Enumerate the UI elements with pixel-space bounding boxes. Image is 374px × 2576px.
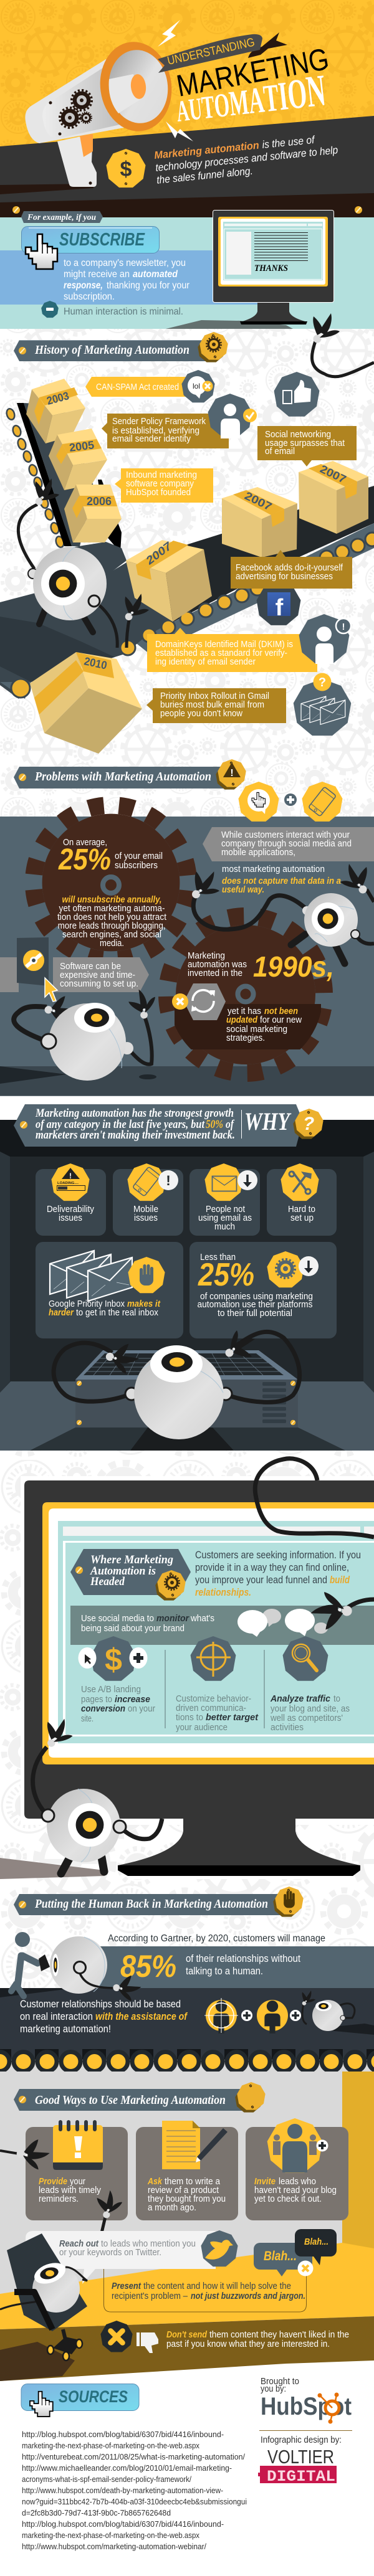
band: social monitoring: Use social media to bbox=[81, 1613, 154, 1624]
callout: software cost bbox=[0, 957, 149, 992]
callout: social data: does not capture that data in a bbox=[222, 876, 341, 886]
card: deliverability: Deliverability bbox=[47, 1205, 95, 1215]
card: provide reminders: leads with timely bbox=[39, 2185, 102, 2195]
bubble: reach out on twitter: to leads who mention you bbox=[101, 2239, 196, 2249]
stat: 25 percent: more leads through blogging, bbox=[58, 921, 166, 931]
robot: climbing monitor bbox=[0, 1719, 162, 1879]
callout: social data: most marketing automation bbox=[222, 864, 325, 874]
callout: sender policy bbox=[102, 414, 229, 448]
callout: inbound marketing bbox=[115, 468, 213, 503]
heading: why banner bbox=[14, 1104, 324, 1147]
list: sources: now?guid=311bbc42-7b7b-404b-a03f-310deecbc4eb&submissiongui bbox=[22, 2498, 247, 2506]
column: ab landing pages: Use A/B landing bbox=[81, 1684, 141, 1695]
ribbon: understanding bbox=[158, 32, 287, 73]
icon: pointer hand bbox=[26, 234, 57, 269]
callout: priority inbox: people you don't know bbox=[160, 709, 242, 719]
logo: voltier digital: Infographic design by: bbox=[261, 2435, 342, 2445]
gear: 1990s: strategies. bbox=[226, 1033, 265, 1043]
box: 2007 large: 2007 bbox=[143, 539, 175, 567]
callout: social networking: usage surpasses that bbox=[265, 438, 345, 448]
bubble: reach out on twitter bbox=[26, 2231, 216, 2284]
band: social monitoring: what's bbox=[190, 1613, 214, 1624]
gear: 1990s: 1990s, bbox=[253, 950, 334, 983]
list: sources: marketing-the-next-phase-of-marketing-on-the-web.aspx bbox=[22, 2441, 200, 2450]
heading: why banner: WHY bbox=[244, 1107, 292, 1135]
gear: 1990s: for our new bbox=[260, 1015, 302, 1025]
card: ask for review bbox=[136, 2121, 238, 2220]
callout: inbound marketing: Inbound marketing bbox=[126, 470, 197, 480]
card: less than 25 percent: automation use their platforms bbox=[197, 1300, 313, 1310]
card: provide reminders: reminders. bbox=[39, 2194, 79, 2204]
title: MARKETING bbox=[174, 42, 332, 103]
column: behavior-driven communications: your audience bbox=[176, 1722, 228, 1733]
gear: 1990s: updated bbox=[226, 1015, 258, 1025]
bubbles: blah blah bbox=[254, 2229, 337, 2276]
bubble: reach out on twitter: Reach out bbox=[59, 2239, 99, 2249]
callout: software cost: expensive and time- bbox=[60, 970, 135, 980]
icon: verified person bbox=[208, 394, 257, 438]
column: behavior-driven communications: Customize behavior- bbox=[176, 1693, 251, 1704]
text block: customer relationships: Customer relationships should be based bbox=[20, 1999, 181, 2010]
card: google priority inbox bbox=[36, 1242, 183, 1338]
icon: phone bbox=[302, 782, 343, 822]
robot: chair bbox=[0, 2233, 87, 2361]
card: invite leads: Invite bbox=[254, 2177, 276, 2187]
column: behavior-driven communications: driven communica- bbox=[176, 1703, 246, 1713]
icon: person search: ! bbox=[342, 622, 345, 632]
gear: 1990s: not been bbox=[264, 1006, 298, 1016]
gear: 1990s bbox=[155, 904, 337, 1086]
card: invite leads: leads who bbox=[279, 2177, 316, 2187]
box: 2007 right: 2007 bbox=[318, 463, 348, 486]
box: 2005 bbox=[49, 429, 107, 490]
logo: voltier digital: VOLTIER bbox=[267, 2446, 334, 2468]
column: analyze traffic: Analyze traffic bbox=[270, 1693, 331, 1704]
outlined box: present the content: recipient's problem – bbox=[112, 2291, 188, 2301]
panel: history bbox=[0, 313, 374, 818]
stat: 85 percent: talking to a human. bbox=[186, 1966, 263, 1977]
card: mobile bbox=[113, 1163, 183, 1236]
icon: software disc bbox=[17, 937, 52, 986]
text block: customer relationships: on real interaction bbox=[20, 2011, 93, 2022]
box: 2007 right bbox=[299, 461, 368, 534]
stat: 25 percent: yet often marketing automa- bbox=[59, 904, 165, 914]
heading: where marketing automation is headed: Where Marketing bbox=[90, 1553, 173, 1566]
logo: hubspot bbox=[261, 2377, 352, 2424]
stat: 25 percent: media. bbox=[100, 939, 124, 949]
callout: priority inbox: buries most bulk email from bbox=[160, 700, 264, 710]
note: don't send: them content they haven't liked in the bbox=[209, 2329, 349, 2340]
card: email use: using email as bbox=[198, 1213, 252, 1223]
column: ab landing pages: increase bbox=[115, 1694, 150, 1705]
callout: facebook advertising: Facebook adds do-it-yourself bbox=[236, 563, 343, 573]
box: 2010 bbox=[30, 652, 142, 754]
column: ab landing pages: pages to bbox=[81, 1694, 112, 1705]
heading: where marketing automation is headed bbox=[70, 1549, 191, 1601]
heading: good ways: Good Ways to Use Marketing Automation bbox=[35, 2093, 226, 2107]
stat: 25 percent: search engines, and social bbox=[62, 930, 161, 940]
title: AUTOMATION bbox=[173, 65, 328, 131]
card: google priority inbox: Google Priority Inbox bbox=[49, 1299, 125, 1309]
robot: keyboard operator bbox=[54, 1330, 300, 1439]
icon: facebook bbox=[257, 582, 300, 625]
heading: history: History of Marketing Automation bbox=[34, 343, 189, 357]
column: ab landing pages: $ bbox=[105, 1642, 122, 1677]
card: email use: People not bbox=[206, 1205, 245, 1215]
robot: conveyor operator bbox=[18, 478, 149, 648]
callout: sender policy: email sender identity bbox=[112, 434, 191, 444]
text block: subscribe explanation: subscription. bbox=[64, 291, 115, 302]
callout: facebook advertising: advertising for businesses bbox=[236, 572, 333, 582]
icon: thumbs up bbox=[274, 372, 319, 417]
heading: where marketing automation is headed: Headed bbox=[90, 1575, 125, 1588]
card: provide reminders: Provide bbox=[39, 2177, 67, 2187]
text block: customer relationships: with the assistance of bbox=[95, 2011, 188, 2022]
box: 2003 bbox=[26, 379, 85, 443]
card: ask for review: Ask bbox=[147, 2177, 163, 2187]
outlined box: present the content: not just buzzwords and jargon. bbox=[191, 2291, 305, 2301]
logo: hubspot: Brought to bbox=[261, 2377, 299, 2387]
robot and human figure bbox=[11, 1932, 145, 2006]
illustration: monitor: THANKS bbox=[254, 263, 288, 273]
list: sources: marketing-the-next-phase-of-marketing-on-the-web.aspx bbox=[22, 2531, 200, 2540]
callout: priority inbox bbox=[146, 688, 286, 723]
panel: footer bbox=[21, 2377, 352, 2551]
icon: envelopes bbox=[294, 673, 351, 736]
text block: subscribe explanation bbox=[64, 258, 190, 302]
list: sources: http://www.michaelleander.com/blog/2010/01/email-marketing- bbox=[22, 2464, 232, 2473]
box: 2003: 2003 bbox=[46, 389, 70, 407]
column: analyze traffic: to bbox=[333, 1693, 340, 1704]
card: less than 25 percent bbox=[189, 1242, 337, 1338]
text block: customers seeking information bbox=[195, 1550, 361, 1598]
icon: envelopes: ? bbox=[319, 676, 326, 689]
panel: hero bbox=[0, 0, 374, 217]
callout: social data: useful way. bbox=[222, 885, 264, 895]
icon: plus bbox=[284, 793, 297, 806]
callout: can-spam: CAN-SPAM Act created bbox=[96, 382, 179, 392]
text block: definition: Marketing automation bbox=[154, 140, 260, 161]
box: 2007 middle bbox=[222, 487, 297, 557]
column: ab landing pages: on your bbox=[128, 1703, 155, 1714]
callout: social data bbox=[203, 827, 374, 895]
column: behavior-driven communications: better target bbox=[206, 1712, 259, 1723]
card: google priority inbox: makes it bbox=[127, 1299, 161, 1309]
card: setup: Hard to bbox=[288, 1205, 315, 1215]
card: less than 25 percent: Less than bbox=[200, 1252, 236, 1262]
card: mobile: Mobile bbox=[133, 1205, 158, 1215]
card: provide reminders: your bbox=[70, 2177, 85, 2187]
conveyor rollers bbox=[0, 2049, 374, 2073]
card: ask for review: they bought from you bbox=[148, 2194, 226, 2204]
robot arm top right bbox=[312, 313, 374, 377]
card: ask for review: review of a product bbox=[148, 2185, 219, 2195]
callout: inbound marketing: HubSpot founded bbox=[126, 488, 191, 498]
callout: social data: mobile applications, bbox=[221, 848, 295, 858]
callout: software cost: Software can be bbox=[60, 962, 121, 972]
icon: dollar badge: $ bbox=[120, 158, 132, 181]
stat: 85 percent bbox=[120, 1949, 300, 1984]
text block: subscribe explanation: thanking you for your bbox=[107, 280, 190, 291]
outlined box: present the content: the content and how it will help solve the bbox=[143, 2281, 291, 2291]
card: mobile: ! bbox=[166, 1173, 171, 1188]
heading: why banner: of any category in the last five years, but bbox=[36, 1118, 205, 1131]
heading: problems: ! bbox=[230, 768, 234, 779]
callout: dkim: ing identity of email sender bbox=[155, 657, 256, 667]
icon: lol bubble bbox=[181, 370, 215, 402]
panel: future bbox=[0, 1451, 374, 1946]
column: behavior-driven communications: tions to bbox=[176, 1712, 203, 1723]
heading: why banner: ? bbox=[303, 1114, 314, 1134]
robot: bottom left bbox=[0, 985, 162, 1084]
card: invite leads: yet to check it out. bbox=[254, 2194, 322, 2204]
note: human interaction: Human interaction is minimal. bbox=[64, 306, 183, 317]
card: deliverability: issues bbox=[59, 1213, 82, 1223]
list: sources: http://venturebeat.com/2011/08/25/what-is-marketing-automation/ bbox=[22, 2453, 246, 2461]
callout: sender policy: Sender Policy Framework bbox=[112, 417, 206, 427]
callout: social data: company through social media and bbox=[221, 839, 352, 849]
card: email use: much bbox=[214, 1222, 235, 1232]
logo: voltier digital bbox=[258, 2435, 342, 2486]
icon: sync hexagon bbox=[172, 983, 226, 1020]
note: don't send: past if you know what they are interested in. bbox=[166, 2339, 330, 2349]
illustration: big monitor bbox=[24, 1480, 374, 1876]
stat: 25 percent: will unsubscribe annually, bbox=[62, 895, 162, 905]
list: sources: http://blog.hubspot.com/blog/tabid/6307/bid/4416/inbound- bbox=[22, 2520, 224, 2529]
logo: voltier digital: DIGITAL bbox=[267, 2468, 335, 2486]
heading: putting the human back bbox=[14, 1887, 304, 1917]
robot arm and claw over screen bbox=[255, 1459, 374, 1632]
floor and server bbox=[0, 1350, 374, 1451]
callout: dkim: established as a standard for verify- bbox=[155, 648, 287, 658]
callout: can-spam bbox=[85, 377, 188, 397]
card: less than 25 percent: 25% bbox=[198, 1257, 254, 1293]
button: subscribe: SUBSCRIBE bbox=[59, 230, 145, 250]
column: ab landing pages: site. bbox=[81, 1713, 94, 1724]
panel: human back bbox=[0, 1932, 374, 2073]
icon: arrow cursor bbox=[45, 978, 57, 1002]
heading: history bbox=[14, 332, 228, 362]
box: 2007 middle: 2007 bbox=[242, 490, 274, 513]
card: less than 25 percent: to their full potential bbox=[218, 1309, 292, 1319]
card: email use bbox=[189, 1163, 260, 1236]
card: ask for review: a month ago. bbox=[148, 2203, 196, 2213]
panel: problems bbox=[0, 759, 374, 1096]
list: sources: acronyms-what-is-spf-email-sender-policy-framework/ bbox=[22, 2475, 191, 2484]
heading: problems: Problems with Marketing Automation bbox=[34, 770, 211, 784]
panel: why bbox=[0, 1096, 374, 1451]
stat: 25 percent: subscribers bbox=[115, 861, 158, 871]
conveyor: horizontal bbox=[0, 486, 374, 699]
robot claws on cards bbox=[0, 2138, 125, 2233]
label: for example: For example, if you bbox=[27, 213, 96, 222]
callout: facebook advertising bbox=[231, 550, 352, 589]
icon: dollar badge bbox=[106, 149, 146, 187]
ribbon: understanding: UNDERSTANDING bbox=[166, 36, 256, 68]
robot: top right bbox=[191, 864, 374, 964]
conveyor: vertical bbox=[6, 403, 127, 576]
card: provide reminders bbox=[26, 2120, 128, 2220]
text block: customers seeking information: provide it in a way they can find online, bbox=[195, 1562, 349, 1573]
card: setup bbox=[267, 1163, 337, 1236]
heading: good ways bbox=[14, 2082, 266, 2113]
outlined box: present the content bbox=[103, 2269, 307, 2312]
icon: twitter bbox=[201, 2230, 238, 2266]
callout: social networking: of email bbox=[265, 447, 295, 457]
box: 2007 large bbox=[126, 539, 212, 622]
column: analyze traffic: activities bbox=[271, 1722, 304, 1733]
box: 2005: 2005 bbox=[69, 438, 95, 454]
gear: 1990s: Marketing bbox=[188, 951, 225, 961]
callout: software cost: consuming to set up. bbox=[60, 979, 138, 989]
column: ab landing pages bbox=[79, 1636, 155, 1724]
card: ask for review: them to write a bbox=[165, 2177, 221, 2187]
card: deliverability: ! bbox=[69, 1172, 72, 1180]
box: 2010: 2010 bbox=[83, 655, 108, 672]
box: 2006 bbox=[64, 485, 122, 542]
button: subscribe bbox=[21, 227, 160, 253]
card: deliverability bbox=[36, 1163, 106, 1236]
stat: 25 percent: On average, bbox=[63, 837, 107, 848]
card: less than 25 percent: of companies using marketing bbox=[200, 1292, 313, 1302]
band: social monitoring bbox=[70, 1606, 374, 1645]
text block: customers seeking information: you improve your lead funnel and bbox=[195, 1574, 327, 1586]
callout: social networking bbox=[257, 426, 357, 466]
text block: definition: is the use of bbox=[262, 134, 316, 151]
stat: 25 percent bbox=[57, 837, 166, 949]
list: sources: http://blog.hubspot.com/blog/tabid/6307/bid/4416/inbound- bbox=[22, 2430, 224, 2439]
bubbles: blah blah: Blah... bbox=[264, 2249, 297, 2263]
card: google priority inbox: harder bbox=[49, 1308, 74, 1318]
column: analyze traffic bbox=[270, 1636, 350, 1733]
callout: social networking: Social networking bbox=[265, 430, 331, 440]
card: invite leads: haven't read your blog bbox=[254, 2185, 337, 2195]
logo: hubspot: you by: bbox=[261, 2384, 286, 2394]
band: social monitoring: being said about your brand bbox=[81, 1623, 185, 1634]
card: google priority inbox: to get in the real inbox bbox=[76, 1308, 159, 1318]
heading: why banner: 50% bbox=[206, 1118, 223, 1131]
text block: subscribe explanation: might receive an bbox=[64, 269, 130, 280]
text block: subscribe explanation: automated bbox=[133, 269, 178, 280]
icon: facebook: f bbox=[276, 595, 284, 621]
heading: why banner: Marketing automation has the strongest growth bbox=[35, 1107, 234, 1120]
heading: problems bbox=[14, 759, 246, 790]
text block: customer relationships bbox=[20, 1999, 188, 2035]
heading: why banner: marketers aren't making their investment back. bbox=[36, 1129, 235, 1142]
callout: dkim: DomainKeys Identified Mail (DKIM) is bbox=[155, 640, 293, 650]
callout: dkim bbox=[147, 628, 317, 672]
list: sources bbox=[22, 2430, 247, 2551]
label: for example bbox=[21, 211, 103, 223]
stat: 85 percent: of their relationships without bbox=[186, 1953, 300, 1964]
text block: subscribe explanation: to a company's newsletter, you bbox=[64, 258, 186, 268]
card: mobile: issues bbox=[134, 1213, 158, 1223]
list: sources: http://www.hubspot.com/death-by-marketing-automation-view- bbox=[22, 2486, 223, 2495]
callout: social data: While customers interact with your bbox=[221, 830, 350, 840]
logo: hubspot: HubSpot bbox=[261, 2393, 352, 2420]
list: sources: d=2fc8b3d0-79d7-413f-9b0c-7b865762648d bbox=[22, 2509, 171, 2517]
gear: 1990s: automation was bbox=[188, 960, 247, 970]
note: human interaction bbox=[41, 301, 183, 318]
gear: email subscribers bbox=[26, 797, 196, 968]
icon: megaphone bbox=[25, 37, 177, 187]
heading: putting the human back: Putting the Human Back in Marketing Automation bbox=[34, 1897, 268, 1911]
icon: lightning bolt bottom bbox=[166, 121, 193, 141]
icon: person search bbox=[299, 614, 359, 664]
list: sources: http://www.hubspot.com/marketing-automation-webinar/ bbox=[22, 2542, 206, 2551]
bubbles: blah blah: Blah... bbox=[304, 2237, 328, 2247]
equation icons bbox=[204, 1991, 374, 2035]
text block: customers seeking information: relationships. bbox=[195, 1587, 251, 1598]
stat: 85 percent: 85% bbox=[120, 1949, 176, 1984]
icon: lightning bolt top bbox=[158, 20, 180, 47]
note: don't send: Don't send bbox=[166, 2329, 208, 2340]
stat: 25 percent: 25% bbox=[58, 843, 111, 876]
icon: lol bubble: lol bbox=[193, 382, 200, 391]
text block: definition bbox=[154, 131, 340, 186]
box: 2006: 2006 bbox=[87, 495, 112, 508]
icon: click bubble bbox=[238, 782, 279, 822]
outlined box: present the content: Present bbox=[112, 2281, 141, 2291]
callout: sender policy: is established, verifying bbox=[112, 426, 199, 436]
text block: customer relationships: marketing automation! bbox=[20, 2024, 111, 2035]
stat: 25 percent: tion does not help you attract bbox=[57, 912, 166, 922]
column: analyze traffic: your blog and site, as bbox=[271, 1703, 350, 1714]
heading: why banner: of bbox=[226, 1118, 234, 1131]
text: gartner: According to Gartner, by 2020, customers will manage bbox=[108, 1933, 325, 1944]
panel: good ways bbox=[0, 2072, 374, 2381]
gear: 1990s: yet it has bbox=[228, 1006, 261, 1016]
callout: inbound marketing: software company bbox=[126, 479, 194, 489]
gear: 1990s: invented in the bbox=[188, 968, 242, 978]
stat: 25 percent: of your email bbox=[115, 851, 163, 861]
text block: subscribe explanation: response, bbox=[64, 280, 103, 291]
button: sources: SOURCES bbox=[59, 2387, 128, 2406]
card: invite leads bbox=[246, 2118, 348, 2220]
gear: 1990s: social marketing bbox=[226, 1025, 287, 1035]
bubble: reach out on twitter: or your keywords on Twitter. bbox=[59, 2248, 161, 2258]
heading: where marketing automation is headed: Automation is bbox=[90, 1565, 156, 1578]
panel: example bbox=[0, 206, 374, 329]
column: behavior-driven communications bbox=[165, 1636, 264, 1733]
text block: definition: technology processes and software to help bbox=[155, 144, 338, 174]
text block: definition: the sales funnel along. bbox=[156, 165, 254, 186]
band: social monitoring: monitor bbox=[156, 1613, 189, 1624]
column: ab landing pages: conversion bbox=[81, 1703, 125, 1714]
button: sources bbox=[21, 2384, 139, 2417]
title bbox=[173, 42, 332, 131]
note: don't send bbox=[100, 2321, 349, 2353]
text block: customers seeking information: build bbox=[330, 1574, 350, 1586]
card: deliverability: LOADING.... bbox=[57, 1181, 79, 1185]
card: setup: set up bbox=[290, 1213, 314, 1223]
column: analyze traffic: well as competitors' bbox=[270, 1713, 343, 1723]
callout: priority inbox: Priority Inbox Rollout in Gmail bbox=[160, 691, 269, 701]
illustration: monitor bbox=[213, 211, 334, 324]
